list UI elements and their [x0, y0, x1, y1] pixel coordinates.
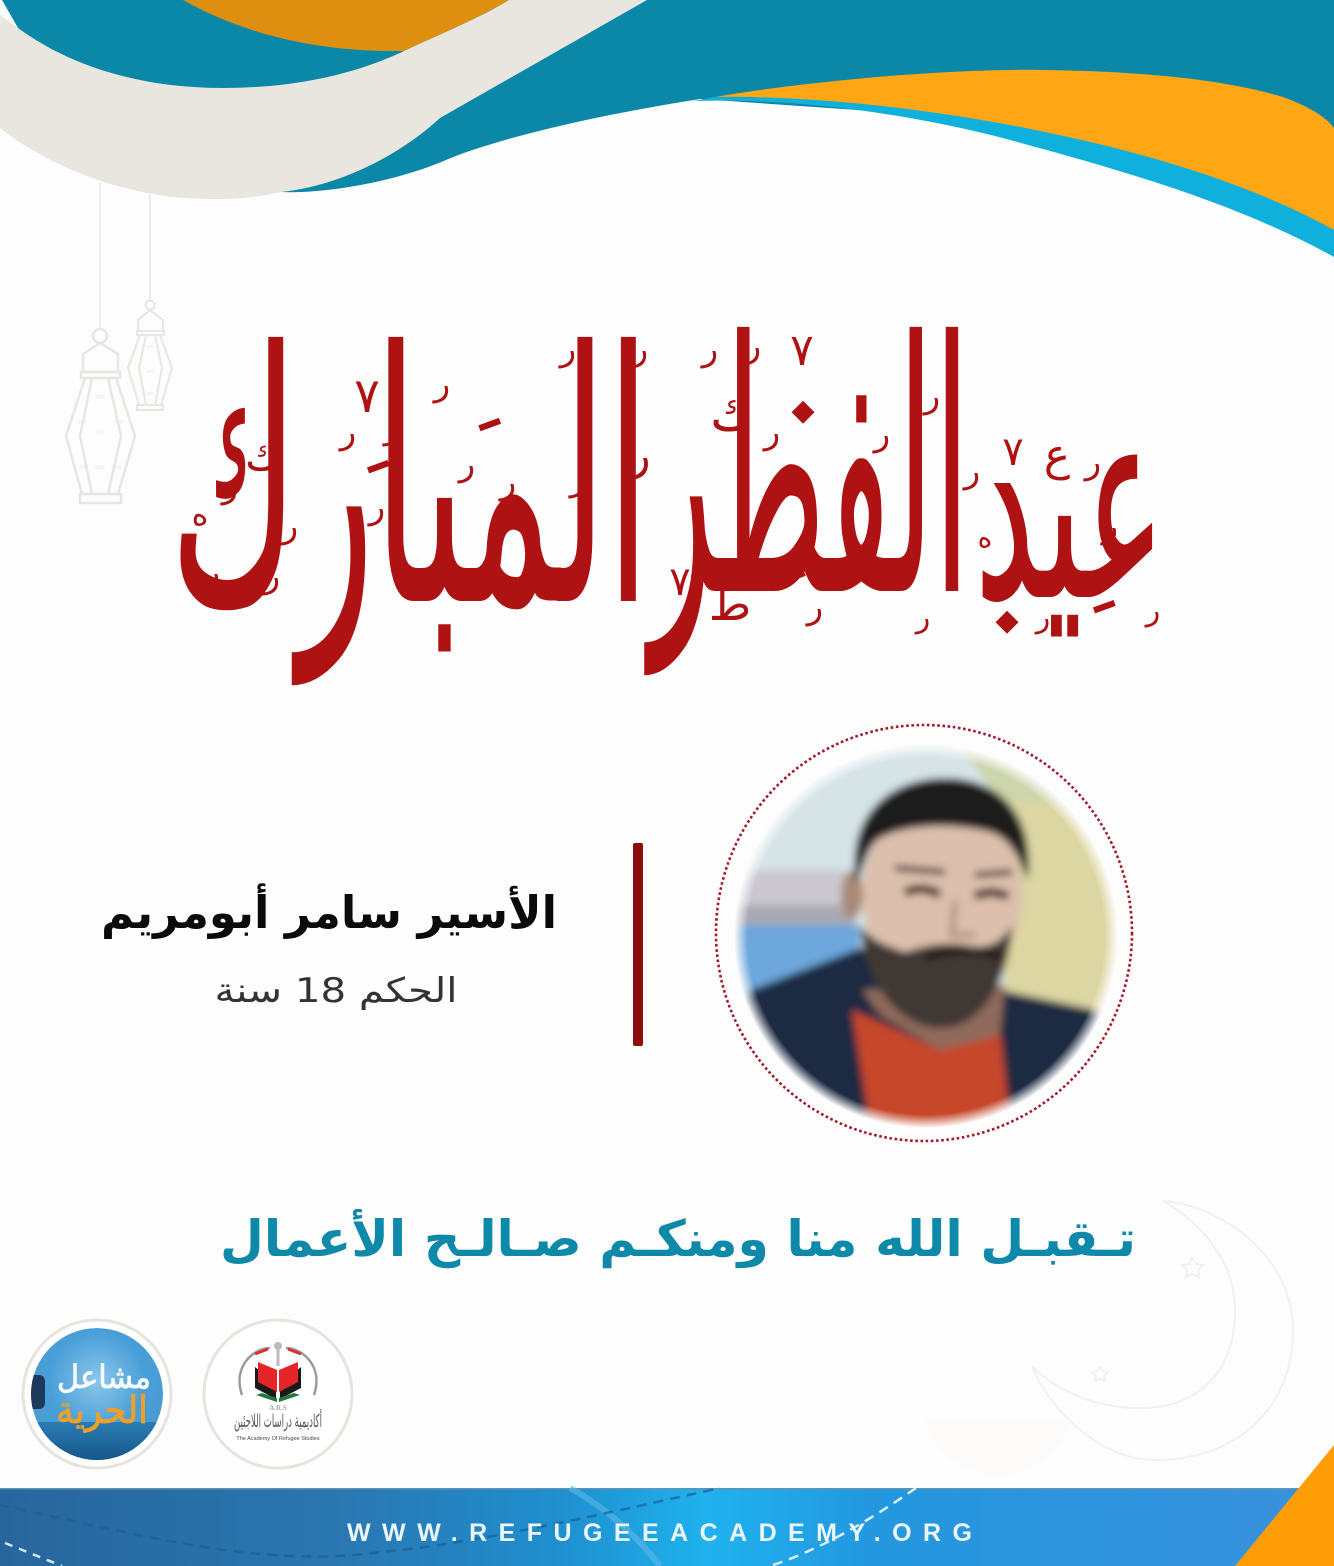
top wave banner	[0, 0, 1334, 257]
ornament marks around the calligraphy: ـ	[1073, 544, 1122, 629]
logo: freedom torches	[23, 1320, 171, 1468]
ornament marks around the calligraphy: ر	[762, 412, 780, 452]
ornament marks around the calligraphy: ر	[872, 414, 890, 454]
footer bar	[0, 1488, 1334, 1566]
ornament marks around the calligraphy: ـ	[458, 362, 508, 447]
ornament marks around the calligraphy: ر	[568, 459, 586, 499]
footer decorations	[570, 1488, 660, 1566]
logo caption text: A.R.S	[269, 1404, 287, 1412]
ornament marks around the calligraphy: ر	[220, 466, 238, 506]
ornament marks around the calligraphy: ر	[498, 462, 516, 502]
ornament marks around the calligraphy: ر	[338, 412, 356, 452]
ornament marks around the calligraphy: ر	[1144, 593, 1160, 628]
icon: large lantern	[66, 329, 135, 503]
ornament marks around the calligraphy: ر	[743, 326, 761, 366]
ornament marks around the calligraphy: ر	[202, 552, 220, 592]
ornament marks around the calligraphy: ط	[709, 577, 751, 631]
logo: freedom torches: الحرية	[56, 1388, 148, 1433]
faint pink semicircle	[925, 1420, 1070, 1475]
ornament marks around the calligraphy: ر	[367, 487, 385, 527]
ornament marks around the calligraphy	[192, 325, 1160, 638]
logo title text: مشاعل	[57, 1358, 151, 1396]
website address: WWW.REFUGEEACADEMY.ORG	[347, 1519, 972, 1547]
logo: academy of refugee studies: The Academy Of Refugee Studies	[236, 1436, 320, 1442]
ornament marks around the calligraphy: ـ	[763, 514, 812, 599]
vertical divider	[633, 843, 643, 1046]
prisoner name: الأسير سامر أبومريم	[101, 883, 557, 939]
icon: faint crescent and stars	[1032, 1201, 1293, 1460]
ornament marks around the calligraphy: ر	[457, 444, 475, 484]
ornament marks around the calligraphy: ٧	[790, 325, 814, 376]
ornament marks around the calligraphy: ◆	[791, 393, 815, 428]
icon: small lantern	[128, 300, 172, 410]
ornament marks around the calligraphy: ك	[245, 430, 281, 481]
ornament marks around the calligraphy: ـ	[347, 404, 396, 489]
ornament marks around the calligraphy: ر	[262, 556, 280, 596]
ornament marks around the calligraphy: ر	[630, 329, 648, 369]
ornament marks around the calligraphy: ر	[280, 506, 298, 546]
icon: open book	[240, 1342, 316, 1402]
orange corner triangle	[1235, 1445, 1334, 1566]
ornament marks around the calligraphy: ر	[962, 451, 980, 491]
ornament marks around the calligraphy: ر	[1100, 506, 1118, 546]
ornament marks around the calligraphy: ر	[1083, 442, 1101, 482]
ornament marks around the calligraphy: ر	[627, 430, 651, 481]
ornament marks around the calligraphy: ر	[914, 600, 930, 635]
logo: academy of refugee studies	[204, 1320, 352, 1468]
ornament marks around the calligraphy: ٧	[354, 368, 380, 424]
ornament marks around the calligraphy: ر	[805, 587, 823, 627]
ornament marks around the calligraphy: ر	[700, 329, 718, 369]
dotted ring	[716, 725, 1132, 1141]
ornament marks around the calligraphy: ر	[432, 364, 450, 404]
ornament marks around the calligraphy: ر	[558, 329, 576, 369]
ornament marks around the calligraphy: ع	[1044, 430, 1070, 481]
logo: academy of refugee studies: أكاديمية دراسات اللاجئين	[234, 1409, 322, 1432]
ornament marks around the calligraphy: ٧	[669, 559, 691, 605]
ornament marks around the calligraphy: ◆	[995, 603, 1019, 638]
ornament marks around the calligraphy: ك	[710, 380, 754, 443]
ornament marks around the calligraphy: ر	[382, 407, 400, 447]
sentence text: الحكم 18 سنة	[215, 971, 458, 1011]
ornament marks around the calligraphy: ٧	[1002, 429, 1024, 475]
ornament marks around the calligraphy: ه	[192, 495, 208, 533]
blessing line: تـقبـل الله منا ومنكـم صـالـح الأعمال	[220, 1208, 1136, 1269]
ornament marks around the calligraphy: ر	[922, 376, 940, 416]
ornament marks around the calligraphy: ه	[978, 521, 992, 554]
ornament marks around the calligraphy: ر	[1034, 600, 1050, 635]
portrait photo	[716, 725, 1132, 1150]
icon: hanging lanterns	[66, 182, 172, 503]
title calligraphy: المبارك	[170, 281, 650, 686]
